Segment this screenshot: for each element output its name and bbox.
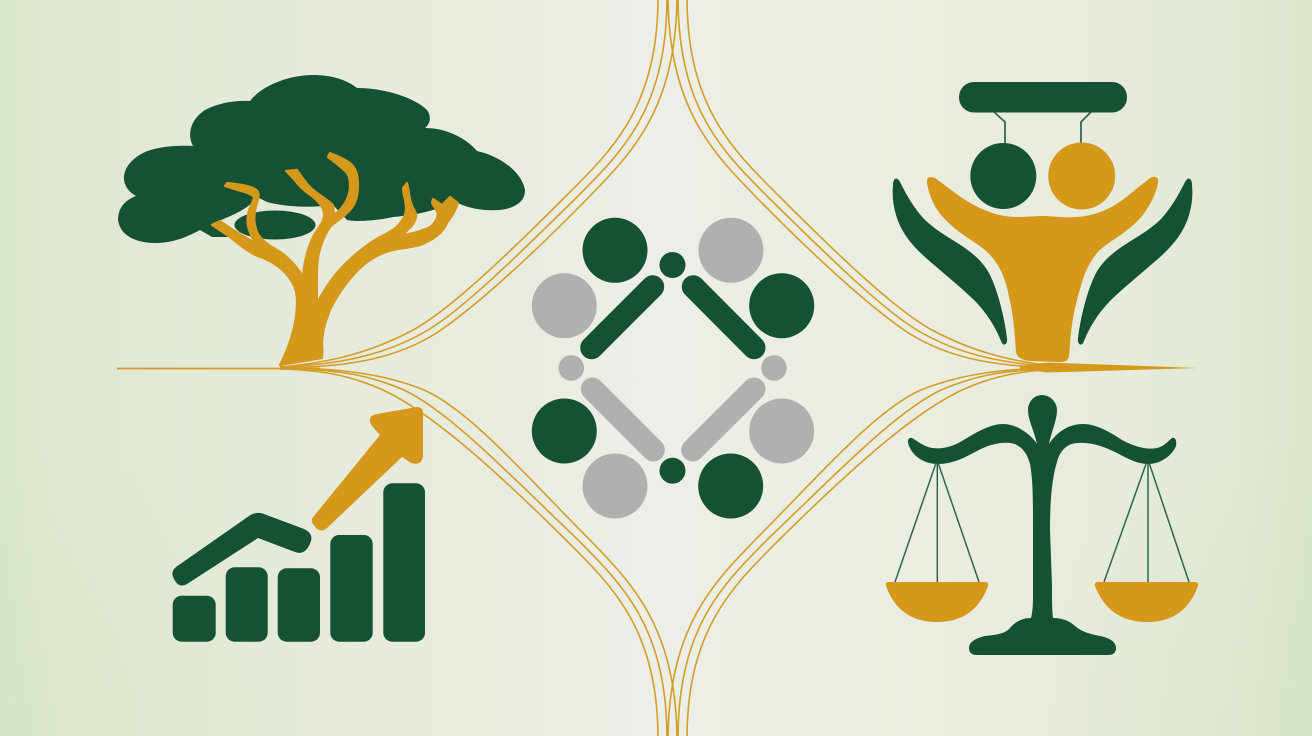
right pan [1095, 582, 1198, 622]
icon: people and leaves [893, 82, 1198, 372]
icon: balance scale [886, 395, 1198, 655]
large circles [582, 218, 648, 283]
scale strings [895, 464, 1189, 582]
left leaf [893, 178, 1007, 345]
icon: acacia tree [118, 75, 525, 365]
trend line [172, 513, 311, 586]
connecting bars [592, 287, 754, 348]
rising arrow [312, 407, 423, 530]
bars [173, 483, 425, 642]
icon: growth chart [172, 407, 425, 642]
gold figure [927, 177, 1158, 362]
gold person head [1048, 142, 1115, 210]
gold base spike [1020, 362, 1198, 372]
right leaf [1078, 178, 1192, 345]
icon: central diamond of circles [532, 218, 814, 519]
connecting lines [117, 0, 1065, 736]
left pan [886, 582, 988, 622]
scale stand and beam [908, 395, 1176, 655]
tree trunk and branches [212, 153, 458, 365]
hanger wires [994, 112, 1091, 143]
tree canopy [118, 75, 525, 243]
hanging bar [959, 82, 1127, 112]
lower canopy ellipse [234, 210, 316, 240]
small circles [660, 252, 686, 278]
green person head [970, 143, 1036, 209]
